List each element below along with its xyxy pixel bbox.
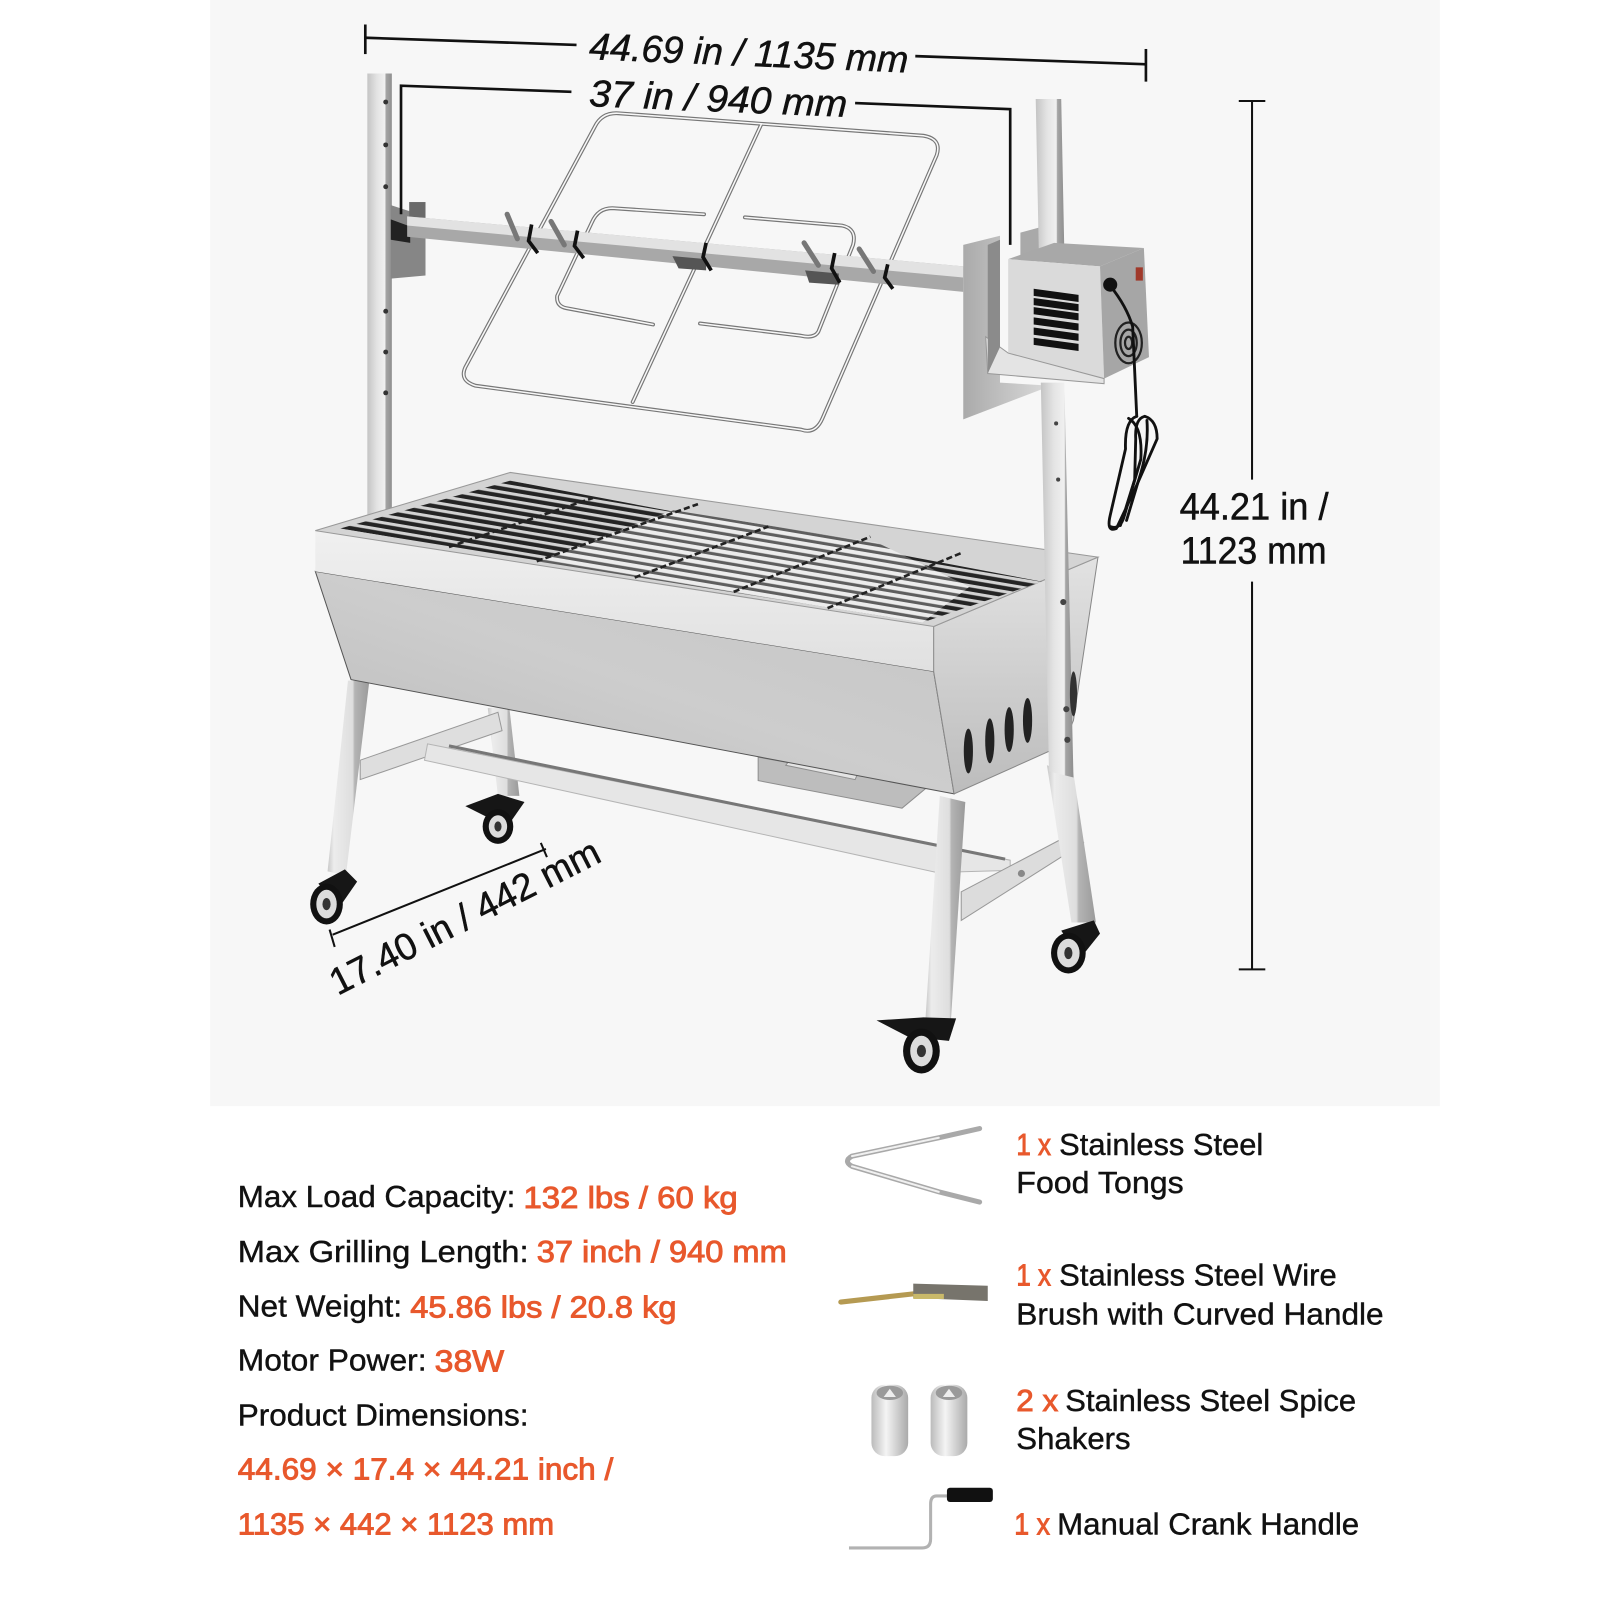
right upright post upper: [1036, 99, 1064, 250]
specifications list: 37 inch / 940 mm: [537, 1235, 787, 1269]
icon: brush: [841, 1284, 988, 1302]
accessory: wire brush: [841, 1259, 1384, 1331]
right upright post lower: [1041, 383, 1077, 778]
specifications list: Max Grilling Length:: [238, 1235, 529, 1269]
grill side panel: [934, 557, 1098, 794]
lower frame crossbars: [360, 712, 1084, 920]
icon: shakers: [871, 1385, 967, 1456]
grate crossbars: [449, 498, 961, 608]
grill top lip: [315, 472, 1098, 627]
panel: product background: [210, 0, 1440, 1106]
brush label: Brush with Curved Handle: [1016, 1297, 1384, 1331]
grill front rim: [315, 531, 934, 671]
rotating basket frame: [464, 113, 938, 431]
crank label: 1 x: [1014, 1508, 1050, 1542]
dimension: grilling length: [401, 72, 1010, 245]
dimension: overall height: 1123 mm: [1181, 529, 1327, 571]
dimension: overall height: [1180, 101, 1329, 969]
dimension: depth: 17.40 in / 442 mm: [322, 830, 607, 1003]
specifications list: 38W: [435, 1344, 504, 1378]
specifications list: 132 lbs / 60 kg: [523, 1181, 738, 1215]
tongs label: Food Tongs: [1016, 1166, 1184, 1200]
brush label: Stainless Steel Wire: [1059, 1259, 1337, 1293]
shakers label: Stainless Steel Spice: [1065, 1384, 1356, 1418]
grate dark layer: [340, 481, 1042, 622]
tongs label: [1016, 1128, 1263, 1200]
dimension: overall width: [365, 24, 1146, 82]
caster: rear right: [1051, 920, 1100, 973]
motor box: [986, 240, 1149, 384]
shakers label: 2 x: [1016, 1384, 1058, 1418]
spit mounting bracket: [391, 202, 426, 279]
tongs label: Stainless Steel: [1059, 1128, 1263, 1162]
specifications list: 45.86 lbs / 20.8 kg: [410, 1290, 677, 1324]
dimension: overall width: 44.69 in / 1135 mm: [588, 25, 909, 81]
ash drawer: [758, 757, 927, 808]
front left leg: [328, 681, 369, 876]
grill front panel: [315, 571, 954, 794]
specifications list: Motor Power:: [238, 1343, 427, 1377]
icon: tongs: [847, 1129, 980, 1202]
accessory: food tongs: [847, 1128, 1263, 1202]
brush label: 1 x: [1016, 1259, 1051, 1293]
rear left leg: [488, 706, 519, 796]
dimension: grilling length: 37 in / 940 mm: [588, 72, 848, 125]
specifications list: Net Weight:: [238, 1289, 402, 1323]
rear right leg: [1047, 765, 1096, 922]
caster: front left: [310, 869, 357, 924]
power cord: [1105, 279, 1157, 529]
spit rod with clamps: [407, 214, 963, 292]
specifications list: Product Dimensions:: [238, 1399, 529, 1433]
specifications list: [238, 1180, 787, 1542]
caster: front right: [877, 1017, 956, 1073]
brush label: [1016, 1259, 1384, 1331]
icon: crank: [849, 1488, 993, 1548]
shakers label: Shakers: [1016, 1422, 1131, 1456]
accessory: spice shakers: [871, 1384, 1356, 1456]
grate light centre: [537, 510, 969, 622]
left upright post: [367, 73, 392, 522]
caster: rear left: [465, 794, 524, 844]
specifications list: Max Load Capacity:: [238, 1180, 515, 1214]
motor mount back plate: [963, 223, 1054, 419]
dimension: overall height: 44.21 in /: [1180, 485, 1329, 527]
shakers label: [1016, 1384, 1356, 1456]
grill body: [315, 472, 1098, 794]
crank label: Manual Crank Handle: [1057, 1508, 1359, 1542]
tongs label: 1 x: [1016, 1128, 1051, 1162]
specifications list: 1135 × 442 × 1123 mm: [238, 1508, 554, 1542]
front right leg: [926, 796, 965, 1018]
specifications list: 44.69 × 17.4 × 44.21 inch /: [238, 1453, 614, 1487]
accessory: crank handle: [849, 1488, 1359, 1548]
vent slots: [964, 698, 1032, 773]
